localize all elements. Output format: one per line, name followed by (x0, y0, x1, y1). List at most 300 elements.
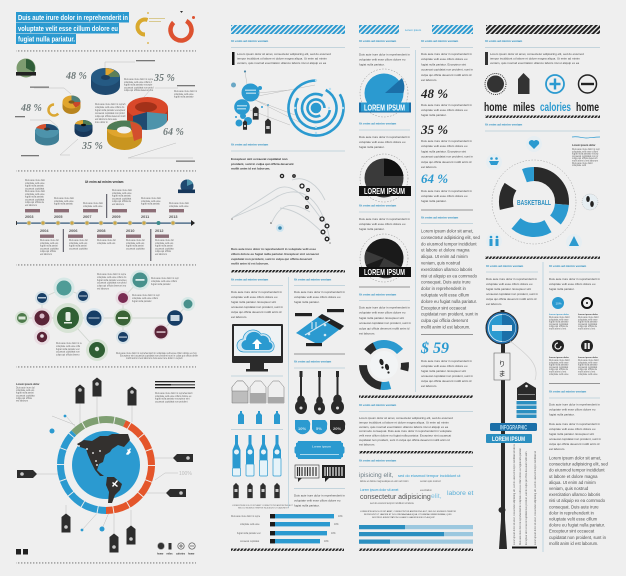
side note: Duis aute irure dolor in repr (572, 148, 600, 151)
rule (294, 367, 345, 369)
timeline text above: fugiat nulla pariatu (25, 196, 44, 199)
rule (359, 129, 410, 131)
hatch divider (359, 396, 473, 398)
body text: Duis aute irure dolor in reprehenderit in (231, 290, 282, 294)
globe caption left (16, 382, 40, 402)
body text: est laborum. (421, 165, 437, 169)
large body text: veniam, quis nostrud (549, 486, 589, 491)
icon captions: occaecat cupidatat (578, 323, 598, 326)
body text: Duis aute irure dolor in reprehenderit in (421, 52, 472, 56)
horizontal bars: fugiat nulla pariatur exc (237, 532, 262, 535)
intro text (485, 52, 584, 65)
icon captions: fugiat nulla pariatur (549, 321, 569, 324)
icon: people dark (581, 340, 593, 352)
network text blocks: voluptate velit esse cillum (132, 297, 158, 300)
body text: fugiat nulla pariatur. (294, 300, 320, 304)
typographic block: sed do eiusmod tempor incididunt ut labore (370, 502, 415, 505)
heading: Ut enim ad minim veniam (549, 264, 587, 268)
stat: 64 percent: 64 % (421, 171, 448, 186)
percent labels (20, 71, 184, 152)
bold text: proident, sunt in culpa qui officia deserunt (231, 162, 294, 166)
large body text: Lorem ipsum dolor sit amet, (421, 228, 473, 234)
body text: Duis aute irure dolor in reprehenderit in (421, 139, 472, 143)
globe sphere (72, 431, 140, 499)
body text: est laborum. (359, 442, 375, 446)
bubble cluster (231, 70, 269, 126)
rule (485, 130, 600, 132)
large body text: culpa qui officia deserunt (421, 318, 469, 323)
body text: voluptate velit esse cillum dolore eu (421, 194, 468, 198)
body text: Duis aute irure dolor in reprehenderit in (421, 103, 472, 107)
horizontal bars: occaecat cupidatat (240, 540, 260, 543)
hatch divider (359, 451, 473, 453)
side note: voluptate velit esse cillum (572, 150, 598, 153)
large body text: ut labore et dolore magna (549, 474, 598, 479)
timeline text below: Duis aute irure dol (69, 239, 88, 242)
timeline years above: 2009 (112, 215, 120, 219)
heading: Ut enim ad minim veniam (294, 360, 332, 364)
body text: voluptate velit esse cillum dolore eu (486, 282, 533, 286)
side note: Duis aute irure dolor (572, 162, 593, 165)
network text blocks: mollit anim id est laborum duis aute irure dolor in repreh (126, 357, 183, 360)
percent labels: 48 % (65, 71, 87, 82)
ribbon: lorem ipsum (486, 434, 532, 443)
donut with footprints (354, 335, 414, 395)
body text: voluptate velit esse cillum dolore eu (549, 282, 596, 286)
icons: guitars (295, 371, 344, 414)
icon: stat circle blue: 10% (556, 302, 562, 306)
side note: occaecat cupidatat non pr (572, 155, 599, 158)
callout text: voluptate velit esse cillum d (124, 81, 153, 84)
timeline text above: voluptate velit esse (169, 205, 189, 208)
icon captions: mollit anim id est (578, 370, 595, 374)
icon captions: Duis aute irure dolor (549, 359, 570, 362)
rule (359, 286, 410, 288)
body text: cillum dolore eu fugiat nulla pariatur. Excepteur sint occaecat (231, 252, 319, 256)
rule (231, 375, 283, 377)
caption: Lorem ipsum (405, 28, 422, 32)
icon captions: occaecat cupidatat (578, 366, 598, 369)
globe caption left: fugiat nulla pariat (16, 392, 34, 395)
timeline text above: Duis aute irure dolo (83, 202, 104, 205)
globe caption left: Duis aute irure dol (16, 386, 35, 390)
globe percent: 100% (179, 471, 192, 477)
heading: Ut enim ad minim veniam (485, 39, 523, 43)
network light halos (32, 270, 195, 345)
body text: Duis aute irure dolor in reprehenderit in voluptate velit esse (231, 247, 316, 251)
ribbon: lorem ipsum blue: LOREM IPSUM (364, 102, 405, 112)
timeline text below: fugiat nulla pariat (155, 245, 173, 248)
vertical divider (288, 277, 290, 508)
callout text: culpa qui officia deserunt mo (124, 89, 154, 92)
globe caption left: voluptate velit ess (16, 389, 35, 392)
globe spokes (37, 397, 178, 534)
icon captions: mollit anim id est (549, 370, 566, 374)
heading: Ut enim ad minim veniam (231, 39, 269, 43)
icon: small pie badge (16, 58, 36, 78)
timeline text below (40, 239, 174, 256)
body text: Duis aute irure dolor in reprehenderit in (359, 217, 410, 221)
network halos (15, 303, 132, 361)
body text: est laborum. (421, 78, 437, 82)
body text: fugiat nulla pariatur. Excepteur sint (421, 62, 466, 66)
body text: culpa qui officia deserunt mollit anim id (421, 379, 472, 383)
heading: Ut enim ad minim veniam (421, 39, 459, 43)
large body text: voluptate velit esse cillum (421, 292, 470, 298)
title: fugiat nulla pariatur. (18, 34, 75, 44)
callout text: fugiat nulla pariatur (174, 96, 194, 99)
road sign with pole: ま (498, 370, 506, 378)
timeline text above: Duis aute irure dolo (25, 190, 46, 193)
timeline text above: fugiat nulla pariatu (112, 195, 131, 198)
side note: fugiat nulla pariatur excep (572, 153, 599, 156)
barcode callouts (295, 465, 345, 482)
header gauges (138, 11, 195, 44)
large body text: do eiusmod tempor incididunt (549, 468, 605, 473)
vertical divider (542, 262, 544, 552)
mini icons: home (188, 552, 195, 556)
donut: navy small (74, 120, 92, 137)
large body text: consequat. Duis aute irure (549, 504, 599, 509)
body text: culpa qui officia deserunt mollit anim id (421, 73, 472, 77)
rule (231, 46, 345, 48)
badges: 20% (333, 426, 341, 431)
intro text: Lorem ipsum dolor sit amet, consectetur adipisicing elit, sed do eiusmod (490, 52, 584, 56)
panel: globe (16, 378, 195, 556)
progress bars (359, 525, 473, 544)
icon captions: occaecat cupidatat (549, 366, 569, 369)
body text: fugiat nulla pariatur. (294, 504, 320, 508)
vertical text: Lorem ipsum dolor sit amet, consectetur adipisicing elit, sed do eiusmod tempor incididunt ut (534, 451, 537, 545)
rule (359, 300, 410, 302)
small tags (243, 106, 271, 134)
bubble text (237, 90, 256, 110)
body text: Duis aute irure dolor in reprehenderit in (359, 135, 410, 139)
typographic block: INCIDIDUNT UT LABORE ET DOLORE MAGNA ALIQUA. UT ENIM AD MINIM VENIAM, QUIS (364, 513, 452, 516)
donut: small multicolour (62, 96, 80, 114)
timeline years below: 2010 (126, 229, 134, 233)
body text: est laborum. (486, 302, 502, 306)
icons: large bottles (232, 435, 281, 476)
timeline text above: fugiat nulla pariatu (141, 203, 160, 206)
network text blocks: Duis aute irure dolor in repr (132, 294, 160, 297)
hatch divider (485, 116, 600, 118)
badges (295, 420, 345, 434)
network text blocks: Duis aute irure dolor in repre (97, 273, 127, 276)
large body text: consequat. Duis aute irure (421, 280, 471, 285)
globe bars right: occaecat cupidatat non proident (155, 400, 188, 403)
intro text: veniam, quis nostrud exercitation ullamco laboris nisi ut aliquip ex ea (237, 61, 327, 65)
body text: Duis aute irure dolor in reprehenderit in (359, 52, 410, 56)
badges: 5% (316, 426, 322, 431)
timeline years below: 2006 (69, 229, 77, 233)
body text: cupidatat non proident, sunt in culpa qui officia deserunt (231, 257, 312, 261)
timeline text below: Duis aute irure dol (97, 239, 116, 242)
heading: Ut enim ad minim veniam (359, 458, 397, 462)
timeline vertical captions (63, 194, 151, 261)
timeline text below: culpa qui officia (155, 251, 172, 253)
mini icons: home (157, 552, 164, 556)
icon: tag (518, 73, 530, 94)
intro text (232, 52, 331, 65)
rule (485, 46, 600, 48)
typographic block: NOSTRUD EXERCITATION ULLAMCO LABORIS NISI UT ALIQUIP (372, 516, 435, 519)
icon: plus circle (546, 75, 564, 93)
icon labels: home (576, 102, 599, 114)
body text: fugiat nulla pariatur. Excepteur sint (549, 432, 594, 436)
vertical text: Excepteur sint occaecat cupidatat non proident, sunt in culpa qui officia deserunt mollit anim (525, 451, 528, 545)
rule (486, 271, 600, 273)
callout lines (30, 62, 193, 158)
icon: heart badge (526, 136, 542, 152)
mini icons: miles (166, 552, 173, 556)
hatch banner (486, 25, 600, 34)
icon captions: fugiat nulla pariatur (549, 364, 569, 367)
icon captions: Lorem ipsum dolor (549, 314, 569, 316)
caption: LOREM IPSUM DOLOR SIT AMET CONSECTETUR ADIPISICING ELIT (232, 504, 294, 507)
body text: mollit anim id est laborum. (231, 262, 269, 266)
timeline text above: voluptate velit esse (83, 205, 103, 208)
large body text: Excepteur sint occaecat (549, 529, 595, 534)
timeline text above: Duis aute irure dolo (25, 179, 46, 182)
icon: people badge (486, 233, 502, 249)
panel: timeline (16, 179, 195, 261)
large body text: aliqua. Ut enim ad minim (421, 254, 468, 259)
timeline text below: voluptate velit ess (97, 242, 116, 245)
globe bars right: fugiat nulla pariatur excepteur sint (155, 398, 190, 401)
timeline text above: occaecat cupidatat (25, 198, 45, 201)
percent labels: 48 % (20, 103, 42, 114)
network text blocks (56, 273, 198, 360)
body text: culpa qui officia deserunt mollit anim id (231, 310, 282, 314)
isometric map (295, 309, 344, 346)
body text: Duis aute irure dolor in reprehenderit in (421, 189, 472, 193)
large body text: Excepteur sint occaecat (421, 305, 467, 310)
typographic block (359, 472, 474, 519)
body text: occaecat cupidatat non proident, sunt in (421, 155, 473, 159)
body text: culpa qui officia deserunt mollit anim id (486, 297, 537, 301)
body text: occaecat cupidatat non proident, sunt in (231, 305, 283, 309)
large body text: exercitation ullamco laboris (421, 267, 472, 272)
rule (359, 46, 473, 48)
timeline years below: 2004 (40, 229, 49, 233)
timeline years above: 2003 (25, 215, 33, 219)
icon: minus circle (578, 75, 596, 93)
vertical text: Duis aute irure dolor in reprehenderit in voluptate velit esse cillum dolore eu fugiat nulla pariatur (519, 448, 522, 545)
icon captions: mollit anim id est (578, 328, 595, 330)
callout text: voluptate velit esse cillum do (95, 106, 125, 109)
mini icons: calories (176, 552, 186, 556)
donut: navy top (91, 68, 120, 95)
callout text: occaecat cupidatat non proid (95, 112, 125, 115)
timeline text below: est laborum (155, 253, 167, 256)
callout text: fugiat nulla pariatur excepte (124, 84, 153, 87)
dotted dividers (16, 50, 196, 564)
panel: column four (484, 25, 608, 552)
body text: voluptate velit esse cillum dolore eu (549, 427, 596, 431)
icon: footprint badge (582, 194, 598, 210)
body text: culpa qui officia deserunt mollit anim id (359, 326, 410, 330)
icon captions: voluptate velit esse (578, 361, 598, 364)
icon captions: Duis aute irure dolor (578, 316, 599, 319)
body text: fugiat nulla pariatur. (359, 227, 385, 231)
network text blocks: voluptate velit esse cillu (56, 345, 81, 348)
timeline text below: occaecat cupidata (155, 247, 174, 250)
timeline text below: occaecat cupidata (40, 247, 59, 250)
large body text: consectetur adipisicing elit, sed (421, 235, 480, 240)
icon captions: voluptate velit esse (549, 373, 569, 376)
icons: small bottles (238, 411, 280, 424)
timeline axis (16, 220, 195, 226)
icon captions: culpa qui officia de (578, 369, 598, 371)
side note (572, 137, 600, 167)
globe caption left: Lorem ipsum dolor (16, 382, 40, 386)
network text blocks: fugiat nulla pariatur (132, 300, 152, 303)
large body text: exercitation ullamco laboris (549, 492, 600, 497)
icon: stat circle blue (552, 297, 564, 309)
body text: Duis aute irure dolor in reprehenderit in (294, 494, 345, 498)
body text: fugiat nulla pariatur. (549, 287, 575, 291)
timeline text below: voluptate velit ess (69, 242, 88, 245)
body text: voluptate velit esse cillum dolore eu (421, 364, 468, 368)
body text: voluptate velit esse cillum dolore eu (421, 57, 468, 61)
body text: voluptate velit esse cillum dolore eu (549, 408, 596, 412)
body text: occaecat cupidatat non proident, sunt in (359, 321, 411, 325)
ribbon box: Lorem ipsum (312, 444, 331, 448)
globe caption left: culpa qui officia (16, 398, 33, 400)
icon captions: occaecat cupidatat (549, 323, 569, 326)
network connectors (22, 280, 188, 350)
timeline text above (25, 179, 190, 208)
stat: 35 percent: 35 % (420, 122, 448, 137)
network text blocks: voluptate velit esse cillum (151, 280, 177, 283)
body text: cupidatat non proident, sunt in culpa qui officia deserunt mollit anim id (359, 438, 450, 442)
body text: voluptate velit esse cillum dolore eu (359, 311, 406, 315)
globe city markers (78, 445, 131, 487)
timeline text below: occaecat cupidata (69, 247, 88, 250)
rule (421, 222, 473, 224)
callout text: fugiat nulla pariatur excepteur (95, 109, 125, 112)
body text: Duis aute irure dolor in reprehenderit in (549, 422, 600, 426)
timeline years below: 2012 (155, 229, 163, 233)
large body text: cupidatat non proident, sunt in (549, 535, 607, 540)
timeline years below: 2008 (97, 229, 105, 233)
intro text: tempor incididunt ut labore et dolore magna aliqua. Ut enim ad minim (490, 56, 580, 60)
body text: commodo consequat. Duis aute irure dolor in reprehenderit in voluptate (359, 429, 452, 433)
body text: voluptate velit esse cillum dolore eu (359, 140, 406, 144)
pie: blue (360, 69, 408, 117)
typographic block: sed do eiusmod tempor incididunt ut (398, 473, 461, 478)
vertical divider (414, 50, 416, 392)
icon captions: voluptate velit esse (578, 318, 598, 321)
network text blocks: fugiat nulla pariatur exc (56, 348, 81, 351)
donut: red large (127, 97, 168, 130)
rule (359, 211, 410, 213)
timeline heading: Ut enim ad minim veniam (85, 180, 124, 184)
network text blocks: fugiat nulla pariatur excepteu (97, 279, 127, 282)
globe bars right: Duis aute irure dolor in reprehenderit (155, 392, 193, 395)
body text: fugiat nulla pariatur. (359, 62, 385, 66)
pie: dark two (360, 234, 408, 282)
scatter network (231, 174, 331, 244)
timeline text above: culpa qui officia de (25, 202, 45, 204)
body text: occaecat cupidatat non proident, sunt in (486, 292, 538, 296)
typographic block: labore et dolore magna aliqua ut enim ad minim (360, 480, 409, 483)
title: voluptate velit esse cillum dolore eu (18, 24, 118, 33)
body text: occaecat cupidatat non proident, sunt in (421, 374, 473, 378)
title (16, 12, 129, 44)
heading: Ut enim ad minim veniam (359, 39, 397, 43)
timeline years above: 2013 (169, 215, 177, 219)
base bar (512, 546, 537, 548)
side note: voluptate velit (572, 164, 586, 167)
percent labels: 35 % (81, 141, 103, 152)
icon captions: fugiat nulla pariatur (578, 364, 598, 367)
heading: Ut enim ad minim veniam (359, 122, 397, 126)
typographic block: consectetur adipisicing (360, 494, 431, 501)
body text: fugiat nulla pariatur. Excepteur sint (421, 369, 466, 373)
large body text: voluptate velit esse cillum (549, 516, 598, 522)
timeline text above: fugiat nulla pariatu (54, 203, 73, 206)
icon captions: culpa qui officia de (549, 326, 569, 328)
icon captions: fugiat nulla pariatur (578, 321, 598, 324)
icons: dark tags (233, 483, 280, 498)
timeline text above: voluptate velit esse (112, 192, 132, 195)
icon captions: culpa qui officia de (549, 369, 569, 371)
timeline text above: voluptate velit esse (25, 182, 45, 185)
timeline text above: voluptate velit esse (25, 193, 45, 196)
bold text: mollit anim id est laborum. (231, 167, 270, 171)
icon captions: Lorem ipsum dolor (549, 357, 569, 359)
panel: 3D donut charts (15, 58, 198, 162)
timeline text below: voluptate velit ess (40, 242, 59, 245)
ribbon box (294, 441, 344, 459)
icon: dashed circle (485, 74, 506, 94)
donut: teal left (35, 124, 59, 146)
icon captions: Duis aute irure dolor (578, 359, 599, 362)
network text blocks: est laborum (97, 288, 109, 290)
body text: voluptate velit esse cillum dolore eu (359, 222, 406, 226)
body text: voluptate velit esse cillum dolore eu (359, 58, 406, 62)
heading: Ut enim ad minim veniam (486, 264, 524, 268)
globe caption left: occaecat cupidata (16, 394, 35, 397)
pie: dark (360, 154, 408, 202)
icon labels: home (484, 102, 507, 114)
side note: mollit anim id est laborum (572, 160, 598, 162)
network nodes (17, 272, 192, 358)
callout text: culpa qui officia deserunt moll (95, 115, 126, 118)
timeline text above: voluptate velit esse (54, 200, 74, 203)
road sign with pole: り (498, 360, 506, 368)
callout text: Duis aute irure dolor in (174, 90, 198, 93)
leader lines (245, 72, 315, 130)
rule (549, 397, 600, 399)
typographic block: LOREM IPSUM DOLOR SIT AMET, CONSECTETUR ADIPISICING ELIT, SED DO EIUSMOD TEMPOR (360, 510, 456, 513)
typographic block: veniam quis nostrud (420, 480, 441, 483)
icon captions (549, 314, 599, 376)
callout text: Duis aute irure dolor in repre (124, 78, 154, 81)
hatch divider (231, 548, 344, 551)
panel: column three (354, 25, 480, 551)
large body text: veniam, quis nostrud (421, 260, 461, 266)
icon captions: voluptate velit esse (549, 361, 569, 364)
heading: Ut enim ad minim veniam (549, 390, 587, 394)
typographic block: exercitation (420, 489, 432, 492)
ribbon: lorem ipsum: LOREM IPSUM (492, 436, 525, 443)
horizontal bars: Duis aute irure dolor in repre (231, 515, 261, 518)
body text: tempor incididunt ut labore et dolore magna aliqua. Ut enim ad minim (359, 420, 449, 424)
donut label: BASKETBALL (517, 200, 552, 207)
